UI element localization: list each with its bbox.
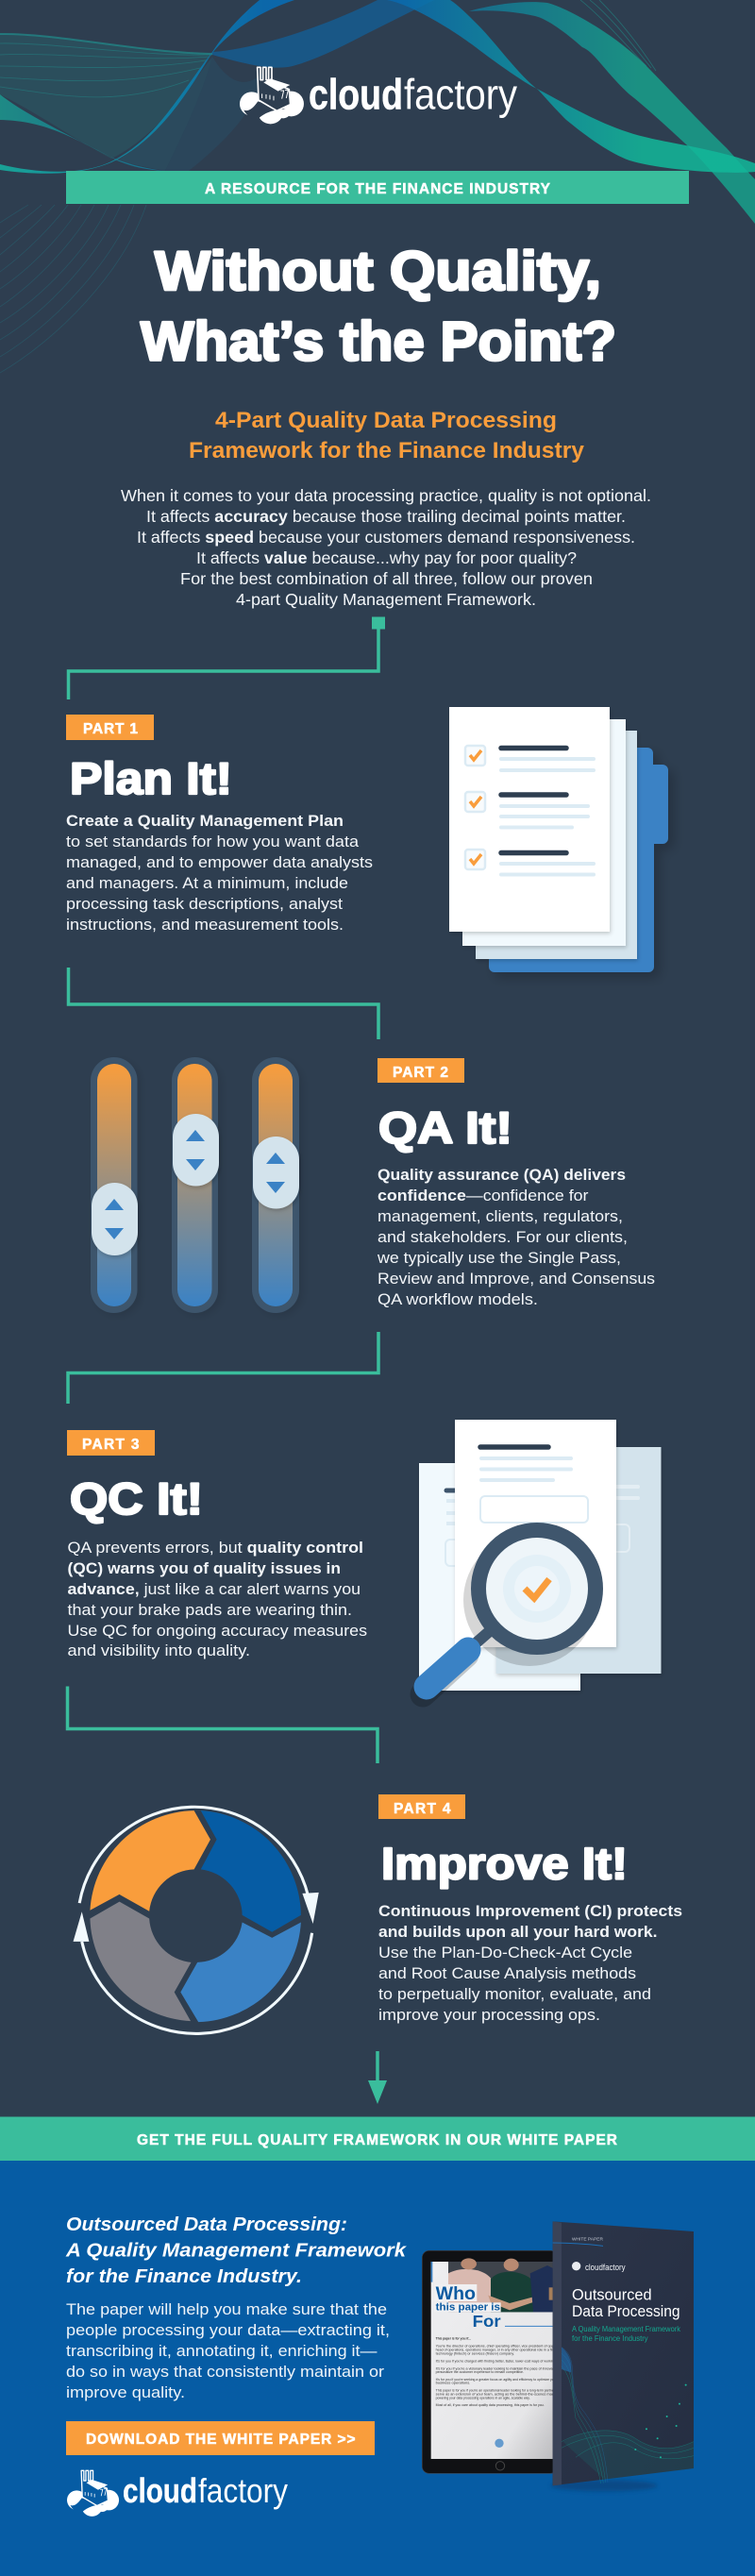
badge: part 1: PART 1 bbox=[83, 721, 138, 737]
panel: part 2 qa it bbox=[91, 1057, 655, 1313]
tablet page text: This paper is for you if... bbox=[436, 2336, 471, 2340]
tablet page text: personalize the customer experience to remain competitive. bbox=[436, 2370, 524, 2374]
body text: improve it: Use the Plan-Do-Check-Act Cycle bbox=[378, 1944, 632, 1961]
logo: cloudfactory (top): factory bbox=[404, 70, 517, 119]
white paper title: for the Finance Industry. bbox=[66, 2266, 302, 2287]
body text: qc it bbox=[68, 1539, 367, 1659]
wordmark: cloud bbox=[309, 70, 403, 119]
heading: qc it: QC It! bbox=[70, 1473, 203, 1524]
body text: qc it: QA prevents errors, but quality control bbox=[68, 1539, 363, 1557]
tablet bbox=[422, 2250, 558, 2473]
tablet page text: head of operations, operations manager, or in any other operational role in a fin bbox=[436, 2348, 554, 2351]
body text: plan it: to set standards for how you want data bbox=[66, 833, 360, 850]
body text: improve it: and Root Cause Analysis methods bbox=[378, 1964, 636, 1982]
wordmark: cloud bbox=[123, 2471, 197, 2510]
intro text block: When it comes to your data processing practice, quality is not optional. bbox=[121, 486, 651, 505]
heading: qa it: QA It! bbox=[378, 1103, 512, 1153]
banner: get the full framework: GET THE FULL QUALITY FRAMEWORK IN OUR WHITE PAPER bbox=[137, 2132, 617, 2148]
badge: part 4: PART 4 bbox=[394, 1801, 451, 1817]
body text: qa it: QA workflow models. bbox=[378, 1290, 538, 1308]
icon: documents and magnifier bbox=[419, 1420, 661, 1694]
icon: factory on a cloud bbox=[240, 67, 304, 124]
tablet: For bbox=[473, 2312, 501, 2331]
body text: qa it: management, clients, regulators, bbox=[378, 1207, 623, 1225]
decorative wave ribbons bbox=[0, 0, 755, 373]
white paper description bbox=[66, 2300, 390, 2401]
tablet page text bbox=[436, 2336, 554, 2407]
body text: qa it: Quality assurance (QA) delivers bbox=[378, 1166, 626, 1184]
panel: part 1 plan it bbox=[66, 707, 668, 972]
tablet page text: It's for you if you're seeking a greater focus on agility and efficiency to optimize yo bbox=[436, 2378, 554, 2382]
title: Without Quality, bbox=[155, 241, 601, 302]
body text: plan it: Create a Quality Management Plan bbox=[66, 812, 344, 830]
white paper description: people processing your data—extracting it, bbox=[66, 2321, 390, 2339]
body text: qc it: (QC) warns you of quality issues in bbox=[68, 1559, 341, 1577]
tablet page text: This paper is for you if you're an operational leader looking for a long-term partne bbox=[436, 2389, 554, 2393]
tablet page text: You're the director of operations, chief operating officer, vice president of opp bbox=[436, 2345, 554, 2349]
tablet: Who bbox=[436, 2284, 476, 2304]
intro text block: It affects speed because your customers demand responsiveness. bbox=[137, 528, 635, 547]
badge: part 3 bbox=[67, 1430, 155, 1456]
body text: qa it: Review and Improve, and Consensus bbox=[378, 1270, 655, 1288]
body text: qc it: advance, just like a car alert warns you bbox=[68, 1580, 361, 1598]
body text: qa it: we typically use the Single Pass, bbox=[377, 1249, 621, 1267]
subtitle: Framework for the Finance Industry bbox=[189, 438, 585, 463]
panel: part 4 improve it bbox=[74, 1794, 682, 2033]
panel: white paper promotion bbox=[0, 2116, 755, 2576]
badge: part 4 bbox=[378, 1794, 465, 1819]
slider 3 bbox=[252, 1057, 299, 1313]
logo: cloudfactory (bottom) bbox=[67, 2470, 288, 2517]
connector 3 bbox=[68, 1332, 378, 1404]
body text: qc it: and visibility into quality. bbox=[68, 1642, 250, 1659]
intro text block: It affects accuracy because those trailing decimal points matter. bbox=[146, 507, 626, 526]
body text: improve it: and builds upon all your hard work. bbox=[378, 1923, 657, 1941]
white paper book bbox=[553, 2221, 694, 2485]
white paper title: A Quality Management Framework bbox=[65, 2241, 407, 2262]
subtitle bbox=[189, 408, 585, 463]
white paper description: do so in ways that consistently maintain or bbox=[66, 2363, 384, 2381]
white paper description: improve quality. bbox=[66, 2383, 185, 2401]
tablet: this paper is bbox=[436, 2302, 500, 2314]
button: download: DOWNLOAD THE WHITE PAPER >> bbox=[86, 2432, 355, 2448]
button: download bbox=[66, 2421, 375, 2455]
badge: part 2: PART 2 bbox=[393, 1065, 448, 1081]
body text: qc it: that your brake pads are wearing thin. bbox=[68, 1601, 352, 1619]
white paper book: WHITE PAPER bbox=[572, 2236, 603, 2242]
body text: improve it: improve your processing ops. bbox=[378, 2006, 600, 2024]
body text: improve it: to perpetually monitor, evaluate, and bbox=[378, 1985, 651, 2003]
intro text block: 4-part Quality Management Framework. bbox=[236, 590, 536, 609]
banner: resource for the finance industry bbox=[66, 171, 689, 204]
white paper title: Outsourced Data Processing: bbox=[66, 2214, 347, 2235]
body text: qa it: and stakeholders. For our clients, bbox=[378, 1228, 628, 1246]
image: tablet and white paper cover bbox=[422, 2221, 694, 2491]
body text: improve it: Continuous Improvement (CI) protects bbox=[378, 1902, 682, 1920]
body text: plan it: and managers. At a minimum, include bbox=[66, 874, 348, 892]
badge: part 2 bbox=[378, 1058, 464, 1083]
slider 2 bbox=[172, 1057, 219, 1313]
badge: part 3: PART 3 bbox=[82, 1437, 140, 1453]
slider 1 bbox=[91, 1057, 138, 1313]
title: What’s the Point? bbox=[141, 311, 616, 372]
connector 2 bbox=[68, 968, 378, 1039]
body text: qa it: confidence—confidence for bbox=[378, 1187, 589, 1204]
panel: part 3 qc it bbox=[67, 1420, 661, 1694]
heading: plan it: Plan It! bbox=[70, 753, 232, 803]
white paper book: Outsourced bbox=[572, 2286, 652, 2304]
banner: get the full framework bbox=[0, 2116, 755, 2161]
icon: documents and folder bbox=[449, 707, 668, 972]
body text: plan it: instructions, and measurement tools. bbox=[66, 916, 344, 934]
tablet page text: It's for you if you're a visionary leader looking to maintain the pace of innovat bbox=[436, 2366, 554, 2370]
white paper description: transcribing it, annotating it, enriching it— bbox=[66, 2342, 378, 2360]
intro text block: For the best combination of all three, follow our proven bbox=[180, 569, 593, 588]
white paper book: cloudfactory bbox=[585, 2263, 626, 2272]
heading: improve it: Improve It! bbox=[381, 1839, 628, 1888]
tablet page text: business operations. bbox=[436, 2382, 470, 2385]
tablet page text: powering your data processing operations in an agile, scalable way. bbox=[436, 2396, 530, 2399]
intro text block bbox=[121, 486, 651, 609]
connector 4 bbox=[68, 1686, 378, 1763]
subtitle: 4-Part Quality Data Processing bbox=[215, 408, 557, 433]
body text: qa it bbox=[377, 1166, 655, 1308]
white paper title bbox=[65, 2214, 407, 2287]
arrow: to white paper bbox=[368, 2051, 387, 2104]
intro text block: It affects value because...why pay for poor quality? bbox=[196, 548, 577, 567]
banner: resource for the finance industry: A RESOURCE FOR THE FINANCE INDUSTRY bbox=[205, 181, 551, 197]
white paper book: for the Finance Industry bbox=[572, 2334, 648, 2343]
icon: factory on a cloud, small bbox=[67, 2470, 119, 2517]
tablet page text: Most of all, if you care about quality data processing, this paper is for you. bbox=[436, 2403, 545, 2407]
body text: improve it bbox=[378, 1902, 682, 2024]
body text: plan it bbox=[66, 812, 373, 934]
tablet page text: serve as an extension of your team, acting as the behind-the-scenes mac bbox=[436, 2392, 554, 2396]
white paper book: A Quality Management Framework bbox=[572, 2325, 680, 2333]
body text: plan it: managed, and to empower data analysts bbox=[66, 853, 373, 871]
magnifier bbox=[423, 1530, 596, 1694]
title bbox=[141, 241, 616, 372]
badge: part 1 bbox=[66, 715, 154, 740]
white paper book: Data Processing bbox=[572, 2302, 680, 2320]
connector 1 bbox=[68, 617, 385, 699]
tablet page text: It's for you if you're charged with finding better, faster, lower-cost ways of workin bbox=[436, 2359, 554, 2363]
logo: cloudfactory (bottom): factory bbox=[198, 2471, 288, 2510]
white paper description: The paper will help you make sure that the bbox=[66, 2300, 387, 2318]
body text: qc it: Use QC for ongoing accuracy measures bbox=[68, 1622, 367, 1640]
logo: cloudfactory (top) bbox=[240, 67, 517, 124]
icon: improvement cycle bbox=[74, 1807, 319, 2033]
icon: sliders bbox=[91, 1057, 299, 1313]
tablet page text: technology (fintech) or services (finserv) company. bbox=[436, 2351, 514, 2355]
body text: plan it: processing task descriptions, analyst bbox=[66, 895, 343, 913]
